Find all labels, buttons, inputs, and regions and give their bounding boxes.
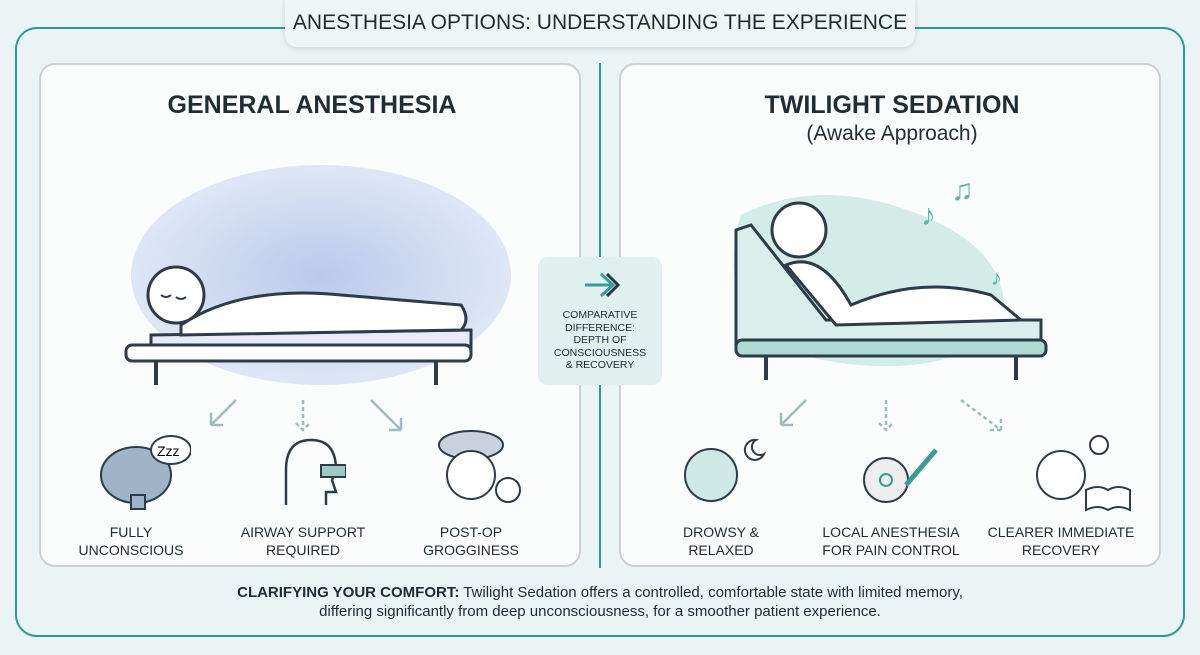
panel: twilight sedation: LOCAL ANESTHESIA <box>822 524 960 540</box>
panel: general anesthesia <box>39 63 581 567</box>
icon: arrow <box>585 273 620 297</box>
heading: general: GENERAL ANESTHESIA <box>168 91 456 119</box>
heading: twilight: TWILIGHT SEDATION <box>764 91 1020 119</box>
title <box>285 0 915 47</box>
labels: RELAXED <box>688 542 754 558</box>
panel: twilight sedation: CLEARER IMMEDIATE <box>988 524 1134 540</box>
icon: clear recovery <box>1036 435 1131 512</box>
heading: twilight <box>764 91 1020 145</box>
panel: twilight sedation <box>619 63 1161 567</box>
panel: twilight sedation: RECOVERY <box>1022 542 1100 558</box>
center callout: DIFFERENCE: <box>565 322 635 334</box>
arrows <box>210 399 402 432</box>
bottom summary <box>237 584 963 620</box>
illustration: reclining patient: ♫ <box>951 174 974 207</box>
labels <box>78 524 184 558</box>
illustration: reclining patient: ♪ <box>921 199 936 232</box>
divider <box>599 63 601 568</box>
bottom summary: differing significantly from deep unconsciousness, for a smoother patient experience. <box>319 603 881 620</box>
center callout: CONSCIOUSNESS <box>554 346 646 358</box>
arrows <box>780 399 1002 432</box>
icon: drowsy head <box>684 438 766 502</box>
panel: general anesthesia: REQUIRED <box>266 542 340 558</box>
panel: general anesthesia: POST-OP <box>440 524 502 540</box>
icon: airway <box>284 438 346 505</box>
labels: UNCONSCIOUS <box>78 542 184 558</box>
illustration: sleeping patient <box>124 165 511 385</box>
icon: local anesthesia <box>863 448 938 503</box>
center callout: COMPARATIVE <box>563 309 637 321</box>
bottom summary: CLARIFYING YOUR COMFORT: Twilight Sedation offers a controlled, comfortable state with limited memory, <box>237 584 963 601</box>
icon: brain: Zzz <box>157 443 180 459</box>
illustration: reclining patient <box>734 174 1048 380</box>
labels <box>683 524 759 558</box>
panel: general anesthesia: AIRWAY SUPPORT <box>241 524 365 540</box>
panel: general anesthesia: GROGGINESS <box>423 542 519 558</box>
center callout <box>538 257 662 385</box>
labels: DROWSY & <box>683 524 759 540</box>
icon: brain <box>100 435 191 510</box>
panel: twilight sedation: FOR PAIN CONTROL <box>822 542 960 558</box>
labels: FULLY <box>110 524 152 540</box>
title: ANESTHESIA OPTIONS: UNDERSTANDING THE EXPERIENCE <box>293 11 907 34</box>
center callout: & RECOVERY <box>566 359 634 371</box>
center callout: DEPTH OF <box>573 334 627 346</box>
heading: twilight: (Awake Approach) <box>806 122 978 145</box>
illustration: reclining patient: ♪ <box>991 265 1002 290</box>
icon: grogginess <box>438 430 521 503</box>
